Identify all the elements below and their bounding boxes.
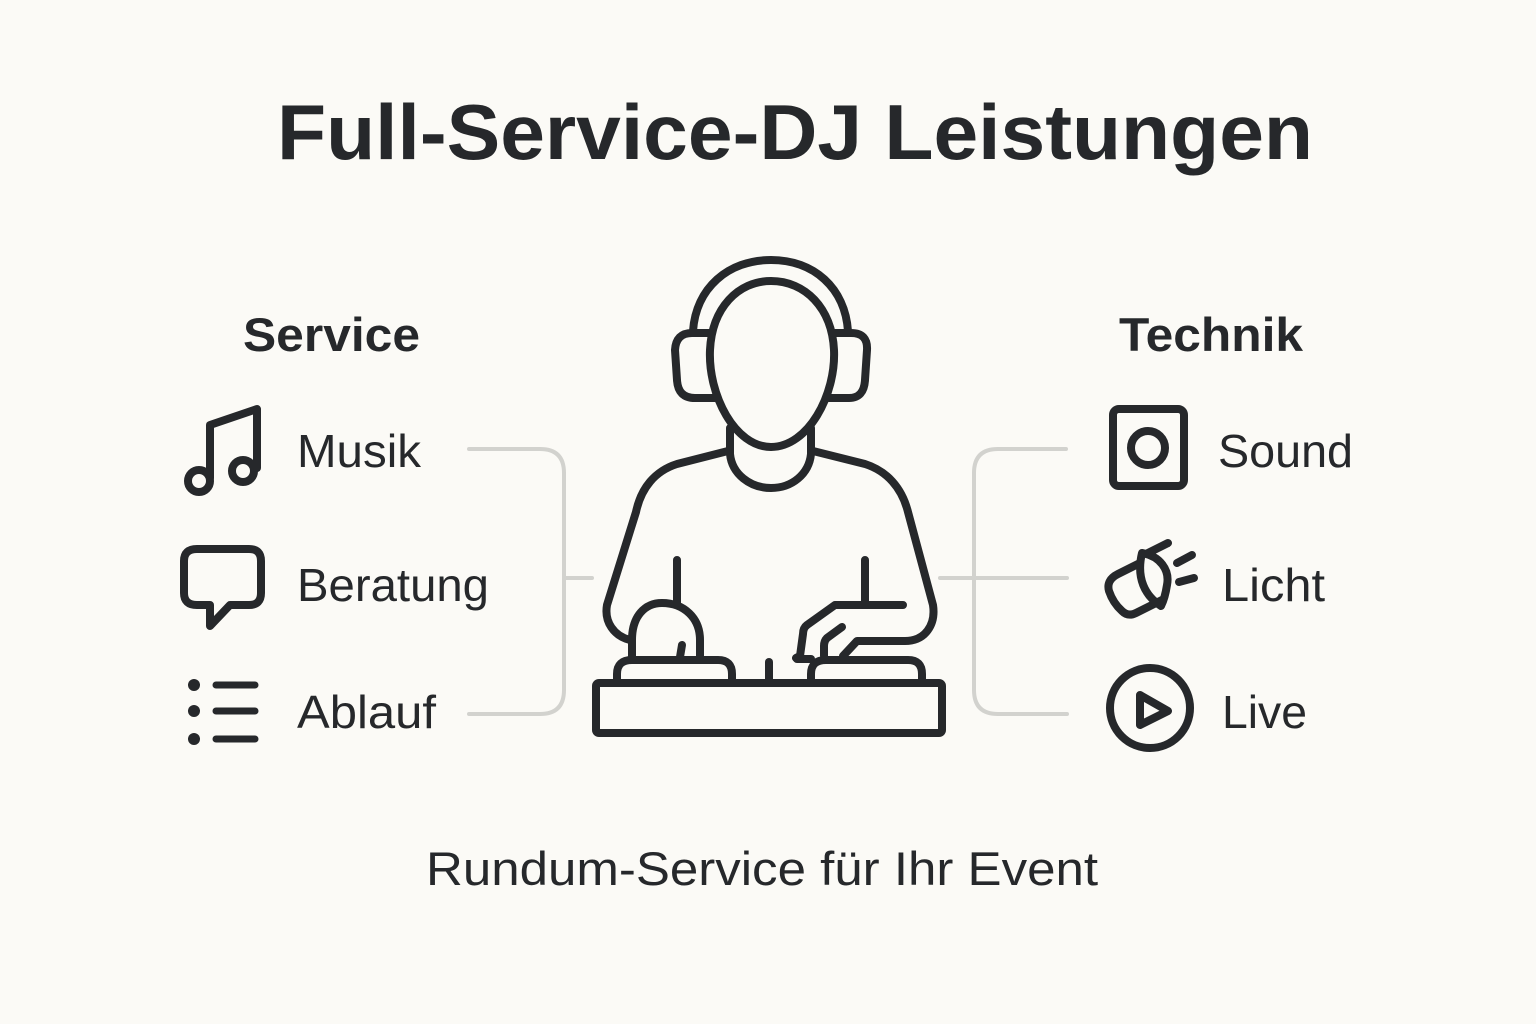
icon: speech bubble xyxy=(184,549,261,626)
footer tagline: Rundum-Service für Ihr Event xyxy=(426,842,1098,895)
desk base xyxy=(596,683,942,733)
icon: list xyxy=(188,679,255,745)
label: Sound: Sound xyxy=(1218,425,1353,477)
title: Full-Service-DJ Leistungen xyxy=(277,88,1313,176)
central icon: DJ with headphones at mixing desk xyxy=(596,260,942,733)
label: Beratung: Beratung xyxy=(297,559,489,611)
torso and arms xyxy=(606,451,728,640)
right hand finger xyxy=(824,627,842,656)
arm lines xyxy=(677,560,865,605)
headphones xyxy=(675,260,867,398)
icon: spotlight xyxy=(1108,543,1194,615)
label: Licht: Licht xyxy=(1222,559,1325,611)
icon: speaker xyxy=(1113,409,1184,486)
heading: Service: Service xyxy=(243,308,420,361)
left hand tick xyxy=(680,645,682,657)
center fader xyxy=(765,662,773,683)
left deck xyxy=(617,660,732,681)
left hand xyxy=(632,603,700,657)
icon: music note xyxy=(188,409,257,492)
connector: technik to DJ xyxy=(940,449,1067,714)
icon: play button xyxy=(1110,668,1190,748)
connector: service to DJ xyxy=(469,449,592,714)
right deck xyxy=(811,660,922,681)
neck and collar xyxy=(730,428,811,488)
right hand xyxy=(796,605,903,658)
label: Live: Live xyxy=(1222,686,1307,738)
head xyxy=(710,281,834,447)
heading: Technik: Technik xyxy=(1119,308,1304,361)
label: Ablauf: Ablauf xyxy=(297,686,436,738)
label: Musik: Musik xyxy=(297,425,422,477)
